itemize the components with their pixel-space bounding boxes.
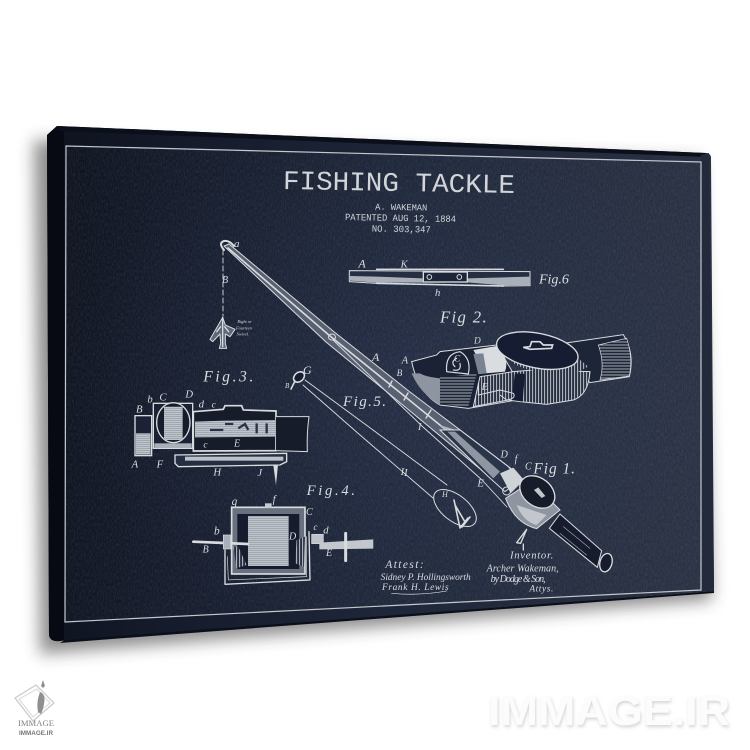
- handle knob: [523, 342, 553, 349]
- label h: h: [435, 288, 440, 299]
- labels: b: [147, 395, 153, 406]
- ring stem: [291, 381, 295, 389]
- left chamber: [135, 416, 152, 456]
- labels: d: [323, 525, 329, 536]
- canvas right wrapped edge: [701, 153, 714, 592]
- attest signature: [381, 559, 471, 594]
- fixtures: [503, 487, 511, 495]
- labels: b: [214, 525, 220, 537]
- labels: d: [199, 399, 205, 410]
- mechanism: [195, 420, 277, 437]
- label A on rod: A: [371, 350, 380, 364]
- figure 6: rod joint: [349, 256, 569, 299]
- cap f: [265, 503, 272, 508]
- upper highlight drum: [473, 346, 506, 374]
- labels: H: [212, 467, 222, 478]
- patent details: [345, 202, 457, 236]
- lower line: [303, 385, 433, 498]
- labels D f C E: I: [400, 467, 405, 478]
- mechanism details: [210, 423, 267, 433]
- case: [232, 507, 305, 574]
- labels: c: [203, 441, 208, 451]
- labels: c: [212, 400, 217, 410]
- spool windings: [164, 407, 183, 440]
- lure body: [217, 317, 229, 347]
- lure note: Swivel.: [237, 331, 249, 336]
- rod shaded lower section: [440, 425, 512, 482]
- heading Fig.3: Fig.3.: [202, 369, 253, 386]
- logo: Immage gallery: [15, 680, 54, 737]
- reel lower housing: [473, 370, 590, 407]
- upper line: [305, 380, 447, 485]
- case inner: [237, 514, 299, 569]
- collar: [500, 468, 524, 493]
- labels: D: [184, 389, 193, 400]
- reel body: [506, 487, 560, 529]
- labels: C: [159, 393, 167, 404]
- E slot: [478, 383, 514, 400]
- hatch sides: [233, 537, 305, 568]
- grip light lines: [560, 527, 590, 555]
- lure: [210, 317, 252, 348]
- rod tip loop: [221, 241, 234, 250]
- labels: f: [273, 495, 278, 506]
- labels A B C D E: A: [401, 355, 409, 366]
- label A: A: [357, 256, 366, 270]
- lure wings: [210, 317, 235, 348]
- shaft: [193, 542, 248, 544]
- loop H: [427, 482, 483, 534]
- labels: C: [306, 507, 313, 518]
- barrel hatching: [598, 338, 631, 380]
- stem: [273, 465, 278, 485]
- main body: [193, 406, 276, 451]
- lure note: Fourteen: [235, 325, 252, 330]
- tube: [276, 417, 309, 452]
- patent date: PATENTED AUG 12, 1884: [345, 212, 456, 225]
- inventor signature: Archer Wakeman,: [486, 564, 559, 575]
- label B: B: [285, 382, 290, 390]
- attest signature: Frank H. Lewis: [381, 583, 449, 593]
- labels: A: [131, 459, 139, 470]
- lower cylinder hatching: [440, 374, 477, 407]
- labels A B C D E: D: [473, 336, 481, 346]
- lure note: Right or: [236, 319, 252, 324]
- heading Fig.2: Fig 2.: [439, 308, 487, 327]
- label I: I: [403, 467, 409, 479]
- rod ferrules: [389, 381, 431, 418]
- inner border frame: [65, 146, 701, 622]
- hanging line: [222, 250, 224, 316]
- canvas left wrapped edge: [47, 126, 64, 641]
- inventor signature: by Dodge & Son,: [491, 574, 546, 585]
- labels: B: [136, 405, 143, 416]
- lower bar highlight: [185, 457, 283, 461]
- case bottom fill: [154, 443, 192, 448]
- title: FISHING TACKLE: [283, 168, 515, 202]
- left curved opening: [412, 373, 440, 405]
- labels D f C E: D: [500, 449, 509, 460]
- fishing line under rod: [333, 340, 507, 507]
- fabric weave: [60, 140, 705, 630]
- spool case: [153, 403, 193, 448]
- labels: g: [232, 496, 238, 508]
- labels: B: [203, 545, 209, 556]
- labels D f C E: f: [515, 454, 519, 465]
- rod body: [224, 244, 513, 487]
- rod butt: [440, 430, 520, 492]
- logo small url: IMMAGE.IR: [19, 730, 53, 737]
- heading Fig.4: Fig.4.: [306, 483, 355, 499]
- outer rod sections: [349, 271, 530, 286]
- inventor name: A. WAKEMAN: [375, 203, 427, 213]
- labels D f C E: [400, 449, 532, 490]
- inventor signature: Inventor.: [509, 551, 553, 562]
- heading Fig.5: Fig.5.: [342, 394, 386, 410]
- heading Fig.6: Fig.6: [538, 272, 569, 287]
- spool C detail: [446, 352, 469, 374]
- figure 4: spool section: [193, 483, 373, 584]
- spool windings: [248, 516, 289, 566]
- labels D f C E: C: [525, 461, 532, 472]
- watermark: IMMAGE.IR: IMMAGE.IR: [488, 687, 730, 734]
- labels A B C D E: [397, 336, 489, 393]
- sleeve: [377, 269, 503, 286]
- rod shading: [447, 432, 500, 478]
- spool ellipse: [157, 403, 190, 443]
- label G: G: [303, 363, 312, 377]
- label I on rod: I: [417, 422, 422, 433]
- pins: [341, 533, 350, 561]
- ring G: [292, 370, 306, 384]
- top plate: [493, 326, 581, 376]
- label K: K: [400, 259, 409, 270]
- handle end cap: [598, 552, 614, 573]
- hook: [454, 500, 470, 528]
- attest signature: Sidney P. Hollingsworth: [381, 573, 471, 583]
- patent number: NO. 303,347: [372, 224, 431, 236]
- screws: [427, 275, 462, 279]
- labels A B C D E: C: [454, 354, 461, 364]
- dark housing panel: [512, 373, 525, 402]
- left barrel body: [412, 345, 517, 408]
- reel top plate: [513, 469, 561, 515]
- inventor signature: [486, 551, 559, 594]
- joint plate: [423, 272, 467, 282]
- ring guide: [328, 334, 336, 340]
- figure 1: fishing rod shaft: [221, 238, 513, 507]
- fitting: [312, 534, 323, 544]
- labels: D: [288, 531, 297, 542]
- crank: [534, 487, 545, 498]
- heading Fig.1: Fig 1.: [532, 460, 575, 477]
- foot stem: [517, 529, 527, 550]
- logo flame: [37, 680, 45, 714]
- labels: E: [233, 439, 240, 450]
- labels D f C E: E: [476, 479, 484, 490]
- canvas top and bottom shaded edges: [57, 126, 714, 643]
- rod highlights: [228, 248, 505, 478]
- lower bar: [175, 453, 287, 467]
- outer bracket: [225, 532, 310, 584]
- right barrel: [563, 335, 631, 383]
- logo name: IMMAGE: [18, 718, 54, 728]
- labels A B C D E: B: [397, 369, 403, 379]
- labels: J: [257, 468, 263, 479]
- body highlight: [517, 505, 547, 525]
- inventor signature: Attys.: [528, 584, 553, 594]
- canvas face: [47, 126, 714, 641]
- light shading: [350, 276, 529, 285]
- figure 2: reel perspective: [397, 308, 631, 408]
- labels: [131, 389, 263, 479]
- rack: [319, 539, 373, 549]
- handle grip: [549, 514, 602, 567]
- reel top plate band: [497, 340, 588, 373]
- labels: F: [156, 459, 164, 470]
- figure 1: reel and handle: [381, 430, 614, 594]
- canvas drop shadow: [34, 140, 712, 654]
- figure 3: reel section: [131, 369, 309, 485]
- chamber fill: [136, 433, 151, 455]
- figure 5: rod guide and hook: [285, 363, 483, 534]
- label H: H: [441, 490, 449, 499]
- fabric glow: [65, 146, 701, 622]
- attest signature: Attest:: [384, 559, 424, 571]
- collar b: [223, 535, 231, 549]
- canvas print: [47, 126, 714, 643]
- labels: [203, 495, 332, 559]
- label B: B: [222, 275, 228, 286]
- label a: a: [234, 238, 240, 250]
- labels A B C D E: E: [481, 382, 489, 393]
- labels: c: [313, 523, 318, 533]
- labels: E: [325, 548, 332, 559]
- lure note: [235, 319, 252, 336]
- logo diamonds: [15, 685, 54, 721]
